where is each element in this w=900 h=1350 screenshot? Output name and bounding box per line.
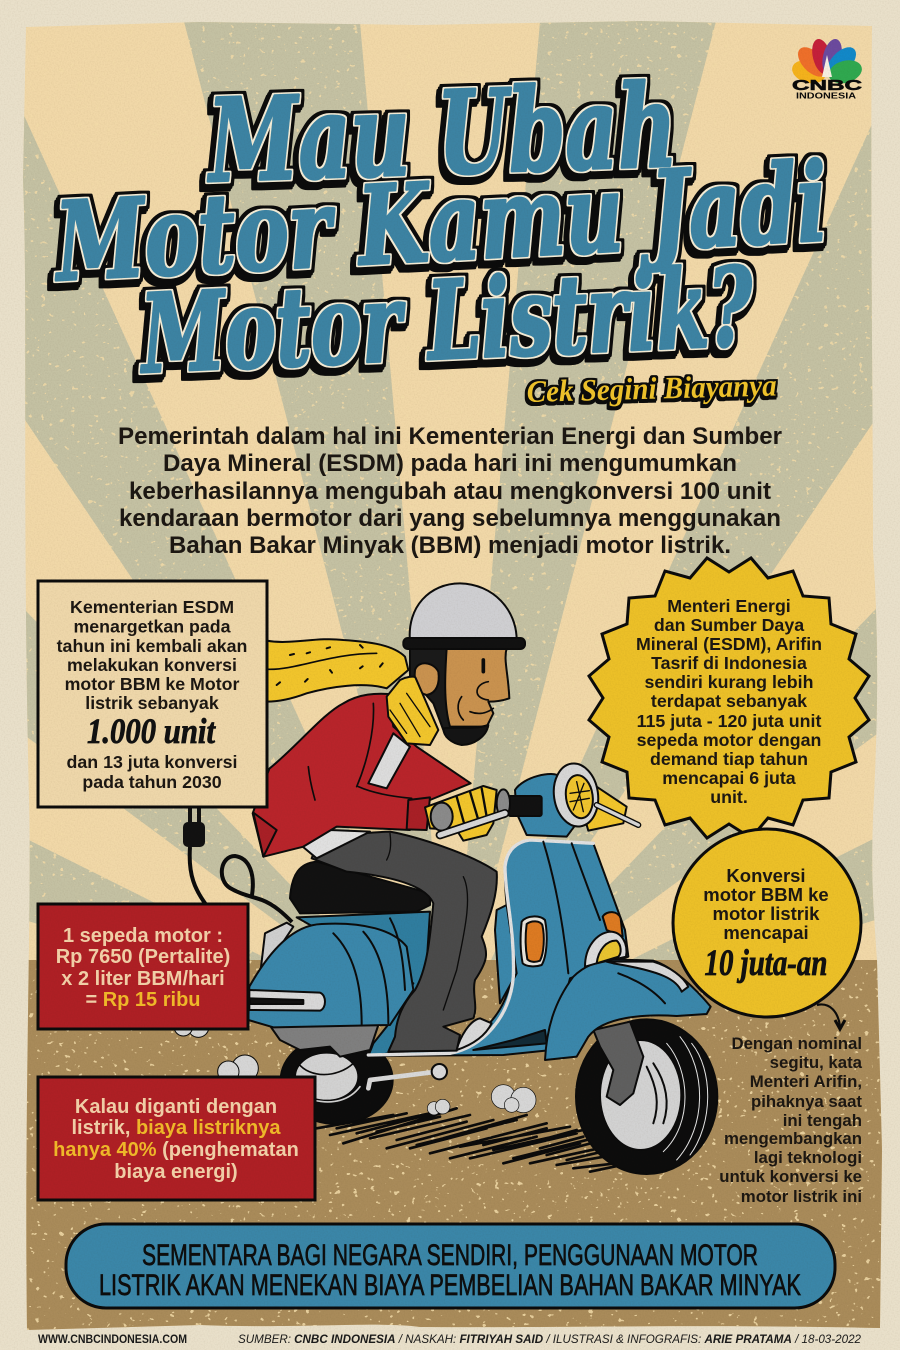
left bar end [431,803,453,831]
text block: technology note: pihaknya saat [751,1092,862,1111]
rear rack [261,923,293,970]
road clouds [427,1085,536,1115]
beard [443,725,488,745]
headset [515,774,577,837]
callout: starburst minister statement: terdapat sebanyak [651,691,807,711]
callout: starburst minister statement: 115 juta - 120 juta unit [637,711,821,731]
title [50,59,830,398]
front turn indicator [521,916,547,966]
callout: ESDM target [38,581,267,807]
callout: electricity saving red box: listrik, biaya listriknya [71,1117,281,1139]
right glove [583,787,627,831]
callout: ESDM target: listrik sebanyak [85,693,219,713]
text block: technology note: motor listrik ini [741,1187,862,1206]
callout: fuel cost red box: = Rp 15 ribu [85,989,201,1011]
text block: technology note: Dengan nominal [731,1034,862,1053]
rear clouds [174,1016,258,1082]
callout: conversion cost circle: 10 juta-an [704,943,828,984]
illustration: rider upper body and handlebar [253,583,638,858]
white shirt [368,733,410,788]
callout: ESDM target: melakukan konversi [67,655,237,675]
callout: starburst minister statement [589,558,869,838]
callout: conversion cost circle: Konversi [726,865,806,886]
callout: ESDM target: tahun ini kembali akan [57,636,247,656]
text block: technology note: untuk konversi ke [719,1167,862,1186]
helmet strap and hair [410,647,453,730]
helmet brim [403,638,525,649]
ground shadow hatching [317,1108,630,1172]
text block: technology note: mengembangkan [724,1129,862,1148]
lower headlamp [585,932,626,967]
nose and mouth lines [458,682,493,720]
callout: starburst minister statement: Menteri Energi [667,596,791,616]
callout: conversion cost circle: mencapai [723,922,809,943]
trousers [312,832,497,1052]
callout: starburst minister statement: sendiri kurang lebih [645,672,813,692]
scooter leg shield and floor [368,840,628,1056]
engine and exhaust [271,1025,378,1057]
front wheel [576,1019,717,1174]
callout: starburst minister statement: dan Sumber Daya [654,615,804,635]
callout: ESDM target: dan 13 juta konversi [67,752,237,772]
callout: starburst minister statement: sepeda motor dengan [637,730,821,750]
callout: electricity saving red box [38,1077,315,1200]
callout: fuel cost red box: Rp 7650 (Pertalite) [56,946,230,968]
red jacket [253,694,471,857]
small indicator [603,912,623,937]
callout: conversion cost circle: motor BBM ke [703,884,829,905]
face [445,648,509,727]
logo: CNBC Indonesia: CNBC [792,77,862,94]
rear wheel [281,1036,393,1124]
helmet dome [410,583,517,642]
icon: power plug and cable [183,808,292,922]
intro paragraph [118,423,782,559]
text block: technology note: Menteri Arifin, [750,1072,862,1091]
kick stand [368,1064,447,1088]
intro paragraph: Pemerintah dalam hal ini Kementerian Energi dan Sumber [118,423,782,450]
tail light strip [249,990,325,1011]
callout: starburst minister statement: demand tiap tahun [650,749,808,769]
callout: ESDM target: Kementerian ESDM [70,597,234,617]
callout: electricity saving red box: Kalau diganti dengan [75,1096,277,1118]
scarf tail [267,639,408,702]
scarf neck [387,677,438,745]
right brake lever [597,805,638,825]
banner: closing statement [66,1224,835,1308]
left brake lever [440,813,505,835]
ear [415,663,439,695]
callout: ESDM target: pada tahun 2030 [82,772,222,792]
callout: ESDM target: motor BBM ke Motor [65,674,240,694]
front fender [545,959,711,1060]
text block: technology note [719,1034,863,1206]
left glove [425,786,497,841]
callout: fuel cost red box [38,904,248,1029]
eye [478,660,489,672]
callout: starburst minister statement: unit. [710,787,748,807]
rear cowl [248,924,413,1027]
text block: technology note: ini tengah [783,1111,862,1130]
callout: starburst minister statement: Mineral (ESDM), Arifin [636,634,822,654]
callout: electricity saving red box: biaya energi) [114,1161,238,1183]
callout: fuel cost red box: x 2 liter BBM/hari [61,968,225,990]
shoe [457,1018,492,1050]
text block: technology note: segitu, kata [770,1053,863,1072]
sweater hem [303,830,370,858]
intro paragraph: kendaraan bermotor dari yang sebelumnya menggunakan [119,505,781,532]
footer: SUMBER: CNBC INDONESIA / NASKAH: FITRIYAH SAID / ILUSTRASI & INFOGRAFIS: ARIE PRATAMA / 18-03-2022 [238,1332,861,1346]
footer: WWW.CNBCINDONESIA.COM [38,1334,187,1346]
title: Mau Ubah [204,59,679,208]
text block: technology note: lagi teknologi [754,1148,862,1167]
handle grip [508,796,542,816]
callout: conversion cost circle [673,829,861,1017]
seat [290,862,430,913]
scooter centre body [297,912,430,1056]
logo: CNBC Indonesia: INDONESIA [796,92,856,100]
headlight [550,761,602,829]
callout: starburst minister statement: mencapai 6 juta [662,768,796,788]
logo: CNBC Indonesia [789,37,865,100]
callout: electricity saving red box: hanya 40% (penghematan [53,1139,299,1161]
callout: ESDM target: menargetkan pada [73,616,231,636]
callout: ESDM target: 1.000 unit [87,711,216,751]
intro paragraph: Daya Mineral (ESDM) pada hari ini mengumumkan [163,450,737,477]
subtitle: Cek Segini Biayanya [526,367,777,409]
arrow: circle to technology note [817,1004,845,1029]
intro paragraph: keberhasilannya mengubah atau mengkonversi 100 unit [129,478,771,505]
callout: fuel cost red box: 1 sepeda motor : [63,925,223,947]
illustration: scooter lower part [174,832,717,1174]
intro paragraph: Bahan Bakar Minyak (BBM) menjadi motor listrik. [169,532,731,559]
callout: starburst minister statement: Tasrif di Indonesia [651,653,807,673]
callout: conversion cost circle: motor listrik [713,903,820,924]
